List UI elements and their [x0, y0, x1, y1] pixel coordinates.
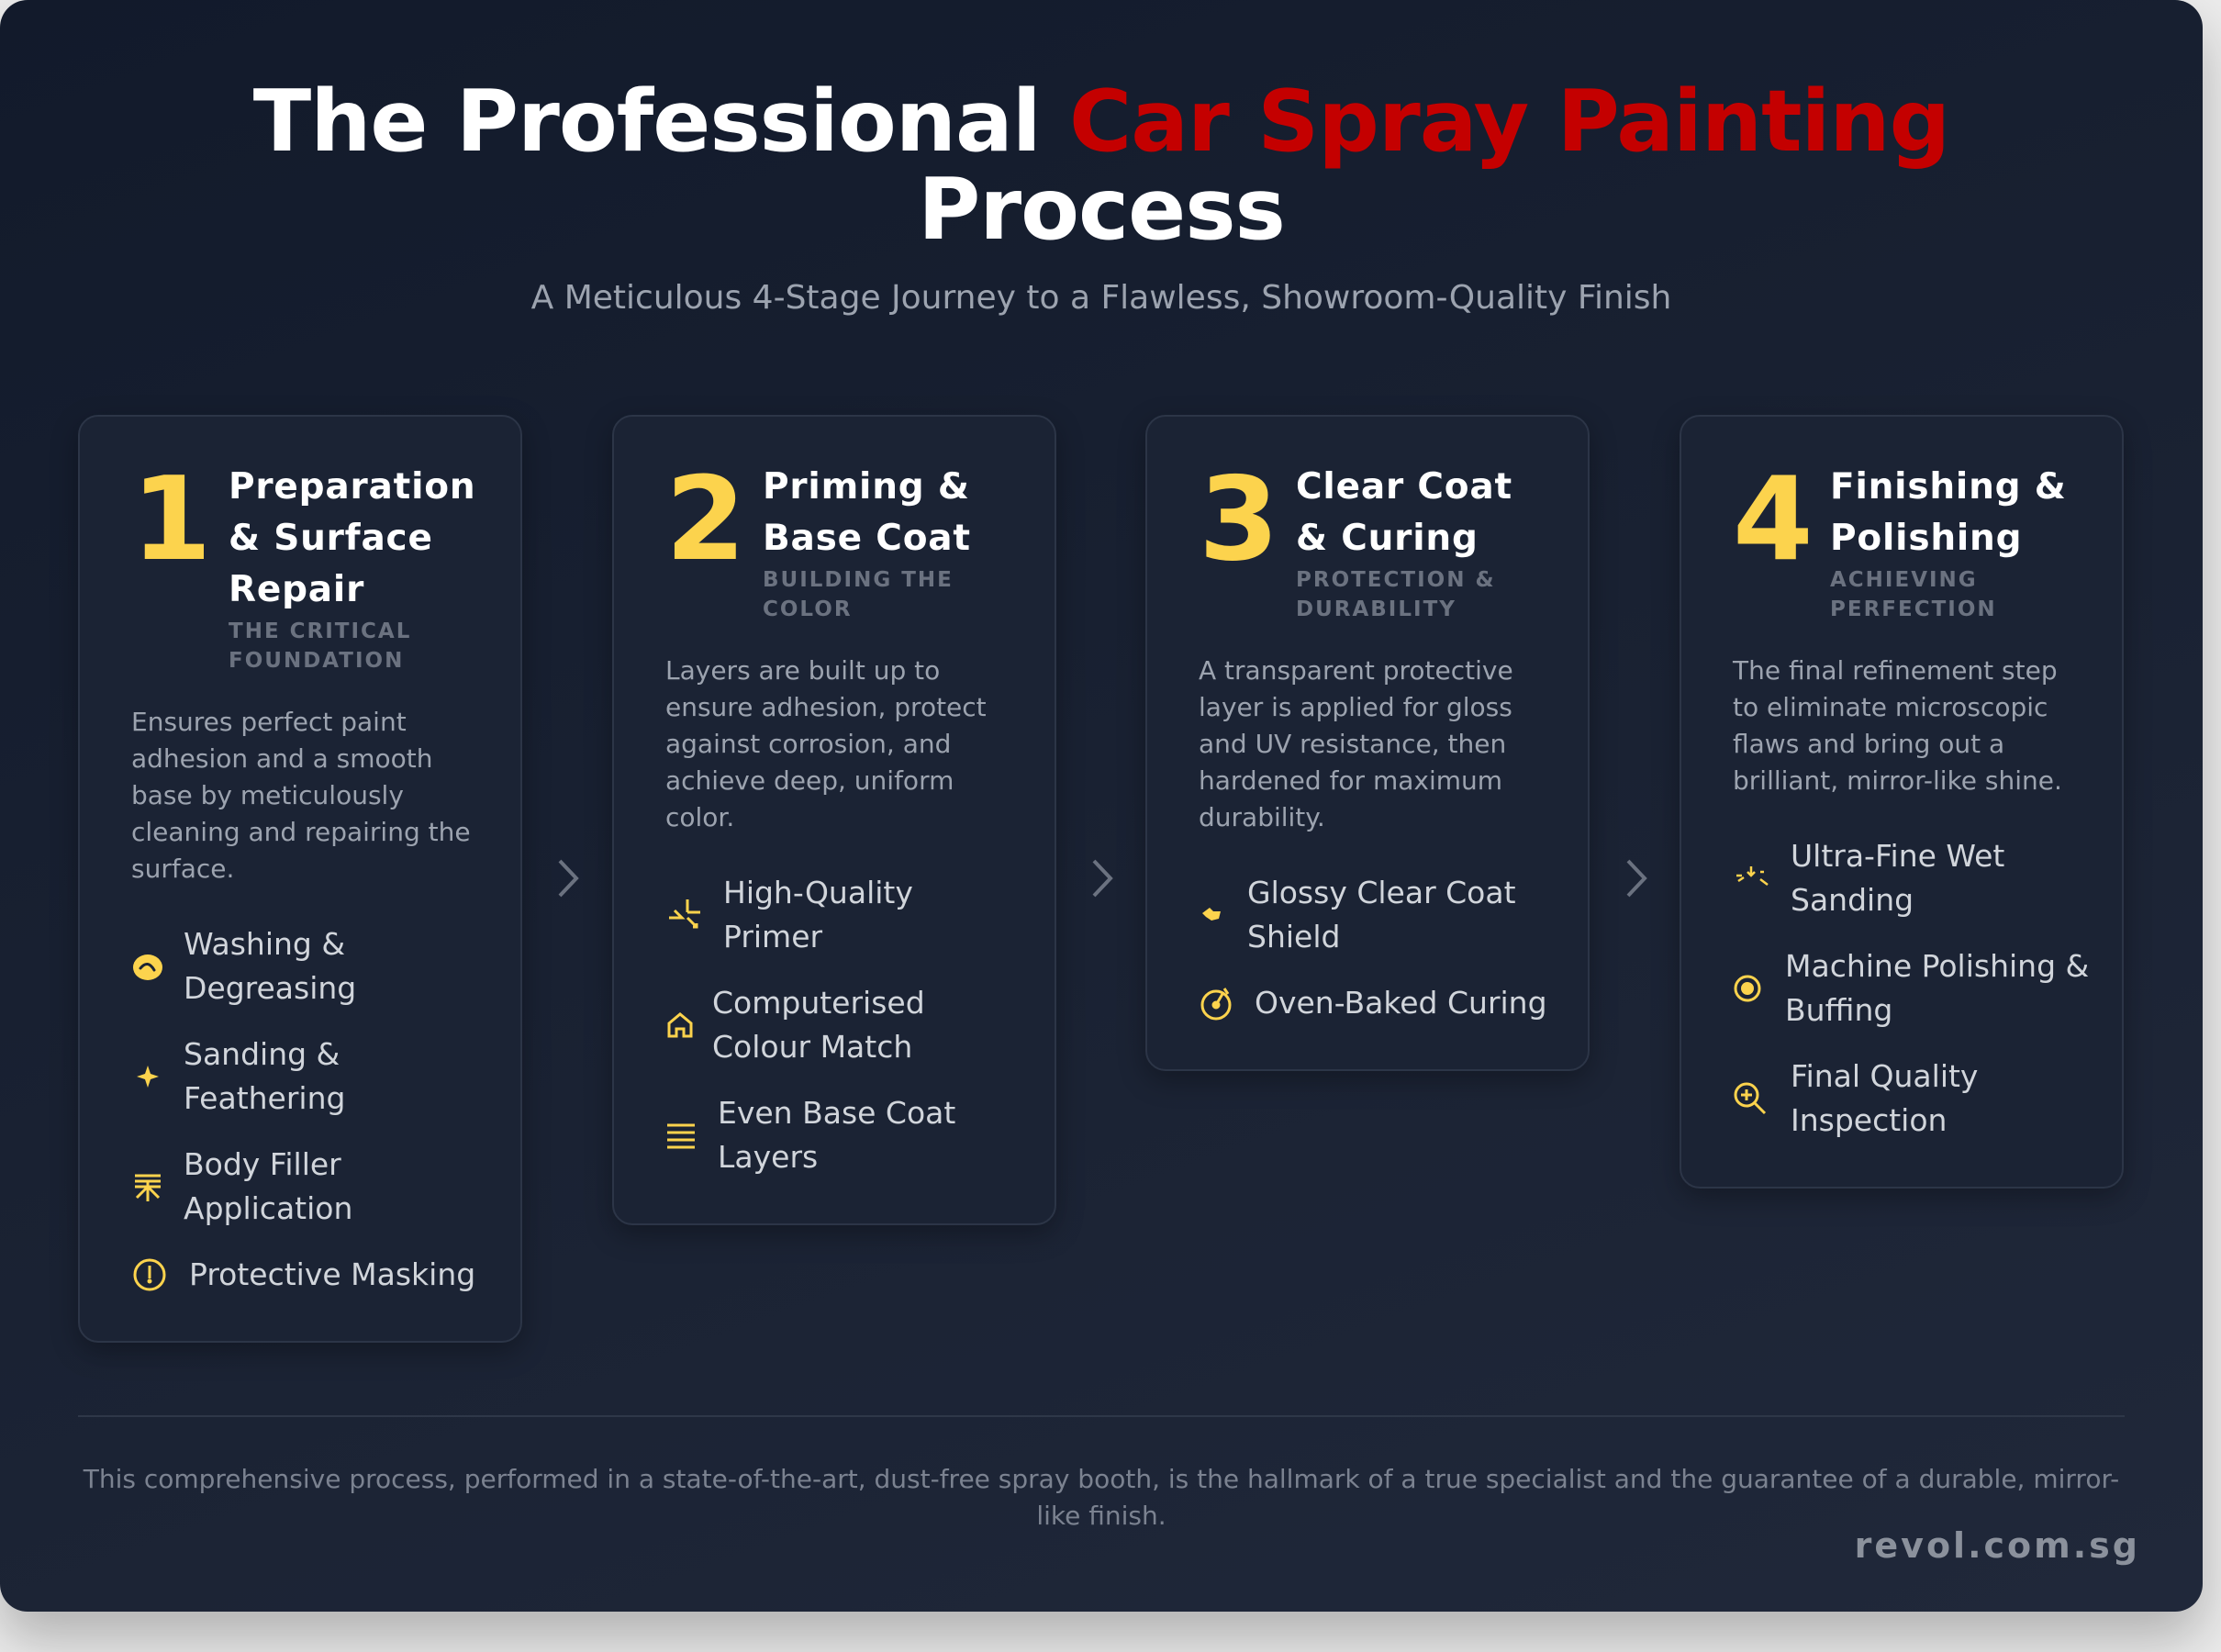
stage 1 header: & Surface [229, 518, 433, 559]
item: masking: Protective Masking [189, 1256, 475, 1292]
stage 1 header: THE CRITICAL [229, 620, 411, 643]
stage 1 header: Preparation [229, 466, 475, 508]
title: The Professional Car Spray Painting [253, 72, 1949, 171]
stage 3 description: A transparent protective [1199, 655, 1513, 686]
stage 2 description: color. [665, 802, 734, 832]
stage 4 header: 4 [1733, 452, 1814, 586]
stage 3 description [1199, 655, 1513, 832]
item: curing: Oven-Baked Curing [1255, 985, 1547, 1021]
stage 2 header: Base Coat [763, 518, 971, 559]
stage 3 list [1200, 875, 1547, 1021]
item: wet sanding: Sanding [1791, 882, 1914, 918]
stage 3 header: & Curing [1296, 518, 1479, 559]
stage 2 description [665, 655, 987, 832]
item: washing: Degreasing [184, 970, 356, 1006]
item: machine polishing: Machine Polishing & [1785, 948, 2089, 984]
item: sanding [137, 1036, 345, 1116]
stage 1 description: Ensures perfect paint [131, 707, 407, 737]
stage 1 description [131, 707, 471, 884]
stage 4 header: ACHIEVING [1830, 568, 1978, 592]
stage 4 header: PERFECTION [1830, 597, 1997, 621]
item: colour match: Computerised [712, 985, 925, 1021]
stage 2 header [665, 452, 971, 621]
stage 1 description: surface. [131, 854, 234, 884]
item: primer: Primer [723, 919, 822, 954]
arrow 2 [1092, 859, 1113, 898]
stage 2 description: ensure adhesion, protect [665, 692, 987, 722]
stage 3 description: layer is applied for gloss [1199, 692, 1512, 722]
stage 4 header: Finishing & [1830, 466, 2067, 508]
item: wet sanding [1736, 838, 2004, 918]
stage 4 description: to eliminate microscopic [1733, 692, 2048, 722]
stage 4 description [1733, 655, 2062, 796]
stage 4 list [1735, 838, 2089, 1138]
item: colour match [668, 985, 925, 1065]
title: Process [918, 160, 1285, 259]
stage 2 list [667, 875, 955, 1175]
item: clear coat: Shield [1247, 919, 1340, 954]
arrow 3 [1626, 859, 1647, 898]
stage 2 header: Priming & [763, 466, 970, 508]
stage 4 description: brilliant, mirror-like shine. [1733, 765, 2062, 796]
item: base coat layers: Layers [718, 1139, 818, 1175]
stage 4 header: Polishing [1830, 518, 2022, 559]
panel: stage 2 [612, 415, 1056, 1225]
title [253, 72, 1949, 259]
stage 3 header: 3 [1199, 452, 1279, 586]
stage 2 header: COLOR [763, 597, 853, 621]
brand: revol.com.sg [1855, 1525, 2140, 1566]
item: clear coat [1202, 875, 1516, 954]
item: primer: High-Quality [723, 875, 913, 910]
item: washing: Washing & [184, 926, 345, 962]
panel: stage 4 [1680, 415, 2124, 1189]
stage 1 header [131, 452, 475, 673]
item: colour match: Colour Match [712, 1029, 912, 1065]
item: washing [133, 926, 356, 1006]
stage 2 description: against corrosion, and [665, 729, 951, 759]
arrow 1 [558, 859, 579, 898]
item: body filler [135, 1146, 352, 1226]
stage 4 header [1733, 452, 2067, 621]
item: inspection: Inspection [1791, 1102, 1947, 1138]
footer text: This comprehensive process, performed in a state-of-the-art, dust-free spray booth, is the hallmark of a true specialist and the guarantee of a durable, mirror-like finish. [84, 1464, 2119, 1531]
panel: stage 1 [78, 415, 522, 1343]
stage 2 description: Layers are built up to [665, 655, 940, 686]
stage 2 header: 2 [665, 452, 746, 586]
stage 4 description: The final refinement step [1733, 655, 2058, 686]
subtitle: A Meticulous 4-Stage Journey to a Flawless, Showroom-Quality Finish [531, 279, 1671, 317]
item: sanding: Feathering [184, 1080, 345, 1116]
item: body filler: Body Filler [184, 1146, 341, 1182]
stage 4 description: flaws and bring out a [1733, 729, 2004, 759]
item: inspection [1735, 1058, 1978, 1138]
item: body filler: Application [184, 1190, 352, 1226]
stage 3 description: hardened for maximum [1199, 765, 1502, 796]
stage 1 header: FOUNDATION [229, 649, 404, 673]
stage 3 header: Clear Coat [1296, 466, 1512, 508]
stage 1 description: base by meticulously [131, 780, 404, 810]
stage 2 description: achieve deep, uniform [665, 765, 954, 796]
stage 3 description: and UV resistance, then [1199, 729, 1506, 759]
stage 1 list [133, 926, 475, 1292]
panel: stage 3 [1145, 415, 1590, 1071]
item: machine polishing [1735, 948, 2089, 1028]
stage 1 description: cleaning and repairing the [131, 817, 471, 847]
item: primer [669, 875, 913, 954]
item: inspection: Final Quality [1791, 1058, 1978, 1094]
item: base coat layers [667, 1095, 955, 1175]
stage 3 description: durability. [1199, 802, 1325, 832]
stage 1 description: adhesion and a smooth [131, 743, 433, 774]
item: clear coat: Glossy Clear Coat [1247, 875, 1516, 910]
stage 2 header: BUILDING THE [763, 568, 954, 592]
stage 1 header: 1 [131, 452, 212, 586]
item: wet sanding: Ultra-Fine Wet [1791, 838, 2004, 874]
stage 3 header [1199, 452, 1512, 621]
item: base coat layers: Even Base Coat [718, 1095, 955, 1131]
stage 3 header: PROTECTION & [1296, 568, 1496, 592]
item: sanding: Sanding & [184, 1036, 340, 1072]
item: machine polishing: Buffing [1785, 992, 1892, 1028]
stage 3 header: DURABILITY [1296, 597, 1456, 621]
stage 1 header: Repair [229, 569, 364, 610]
